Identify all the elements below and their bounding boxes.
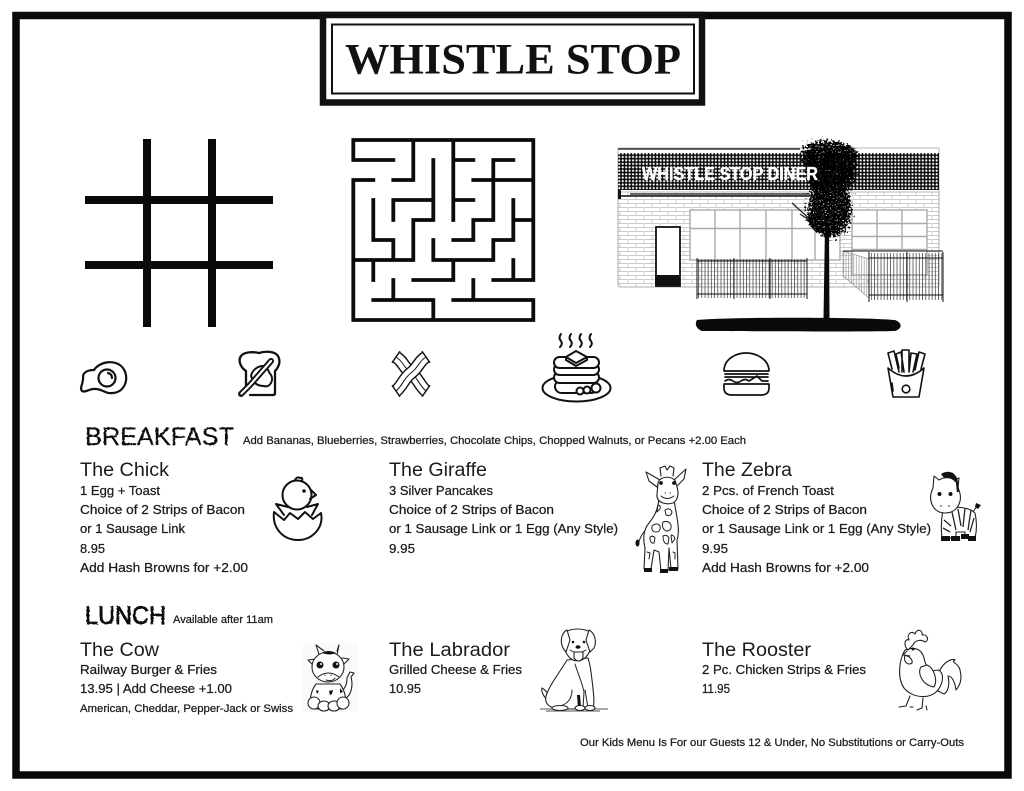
menu item: The Chick: or 1 Sausage Link [80,522,186,536]
title [323,15,702,102]
menu item: The Labrador [389,640,522,696]
right windows [852,210,927,275]
icon: giraffe [636,466,686,573]
menu item: The Giraffe: 9.95 [389,542,415,556]
menu item: The Zebra: 2 Pcs. of French Toast [702,484,835,498]
ground strip [696,318,901,331]
menu item: The Rooster: The Rooster [702,640,812,661]
door [655,227,680,286]
menu item: The Cow [80,640,294,715]
menu item: The Chick: Add Hash Browns for +2.00 [80,561,248,575]
menu item: The Giraffe: The Giraffe [389,460,487,481]
icon: pancakes [542,334,610,402]
heading: lunch [85,602,273,630]
menu item: The Zebra: 9.95 [702,542,728,556]
icon: labrador [540,629,608,711]
menu item: The Labrador: 10.95 [389,682,421,696]
footer note: Our Kids Menu Is For our Guests 12 & Under, No Substitutions or Carry-Outs [580,737,965,749]
title: WHISTLE STOP [345,36,681,84]
menu item: The Rooster: 2 Pc. Chicken Strips & Fries [702,663,866,677]
icon: chick in egg [274,477,321,540]
icon: bacon [392,352,430,396]
menu item: The Giraffe: or 1 Sausage Link or 1 Egg (Any Style) [389,522,618,536]
heading: breakfast [85,423,746,451]
icon: fried egg [81,362,126,393]
icon: burger [724,353,769,395]
icon: cow [303,643,358,712]
heading: lunch: LUNCH [85,602,166,630]
menu item: The Zebra: The Zebra [702,460,792,481]
left windows [690,210,840,260]
menu item: The Zebra [702,460,931,575]
menu item: The Zebra: Choice of 2 Strips of Bacon [702,503,867,517]
menu item: The Rooster [702,640,866,696]
side fence [843,251,943,302]
menu item: The Zebra: Add Hash Browns for +2.00 [702,561,869,575]
menu item: The Giraffe: 3 Silver Pancakes [389,484,493,498]
icon: zebra [931,472,981,541]
heading: breakfast: BREAKFAST [85,423,234,451]
sign band [618,148,939,199]
menu item: The Cow: American, Cheddar, Pepper-Jack or Swiss [80,703,294,715]
icon: toast and knife [240,352,279,395]
icon: fries [888,350,925,397]
icon: rooster [899,630,961,710]
menu item: The Giraffe: Choice of 2 Strips of Bacon [389,503,554,517]
menu item: The Labrador: The Labrador [389,640,511,661]
menu item: The Rooster: 11.95 [702,682,730,696]
menu item: The Chick [80,460,248,575]
menu item: The Chick: 1 Egg + Toast [80,484,161,498]
building wall [618,190,939,287]
tic tac toe grid [85,139,273,327]
sign lettering: WHISTLE STOP DINER [642,164,818,184]
menu item: The Chick: 8.95 [80,542,105,556]
menu item: The Chick: Choice of 2 Strips of Bacon [80,503,245,517]
heading: lunch: Available after 11am [173,614,273,626]
menu item: The Zebra: or 1 Sausage Link or 1 Egg (Any Style) [702,522,931,536]
heading: breakfast: Add Bananas, Blueberries, Strawberries, Chocolate Chips, Chopped Walnuts, or Pecans +2.00 Each [243,435,746,447]
menu item: The Giraffe [389,460,618,556]
front fence [697,258,807,299]
menu item: The Chick: The Chick [80,460,170,481]
menu item: The Cow: The Cow [80,640,159,661]
menu item: The Cow: Railway Burger & Fries [80,663,217,677]
menu item: The Cow: 13.95 | Add Cheese +1.00 [80,682,232,696]
maze [353,140,533,320]
menu item: The Labrador: Grilled Cheese & Fries [389,663,522,677]
tree [792,140,857,318]
diner building illustration [618,140,943,331]
